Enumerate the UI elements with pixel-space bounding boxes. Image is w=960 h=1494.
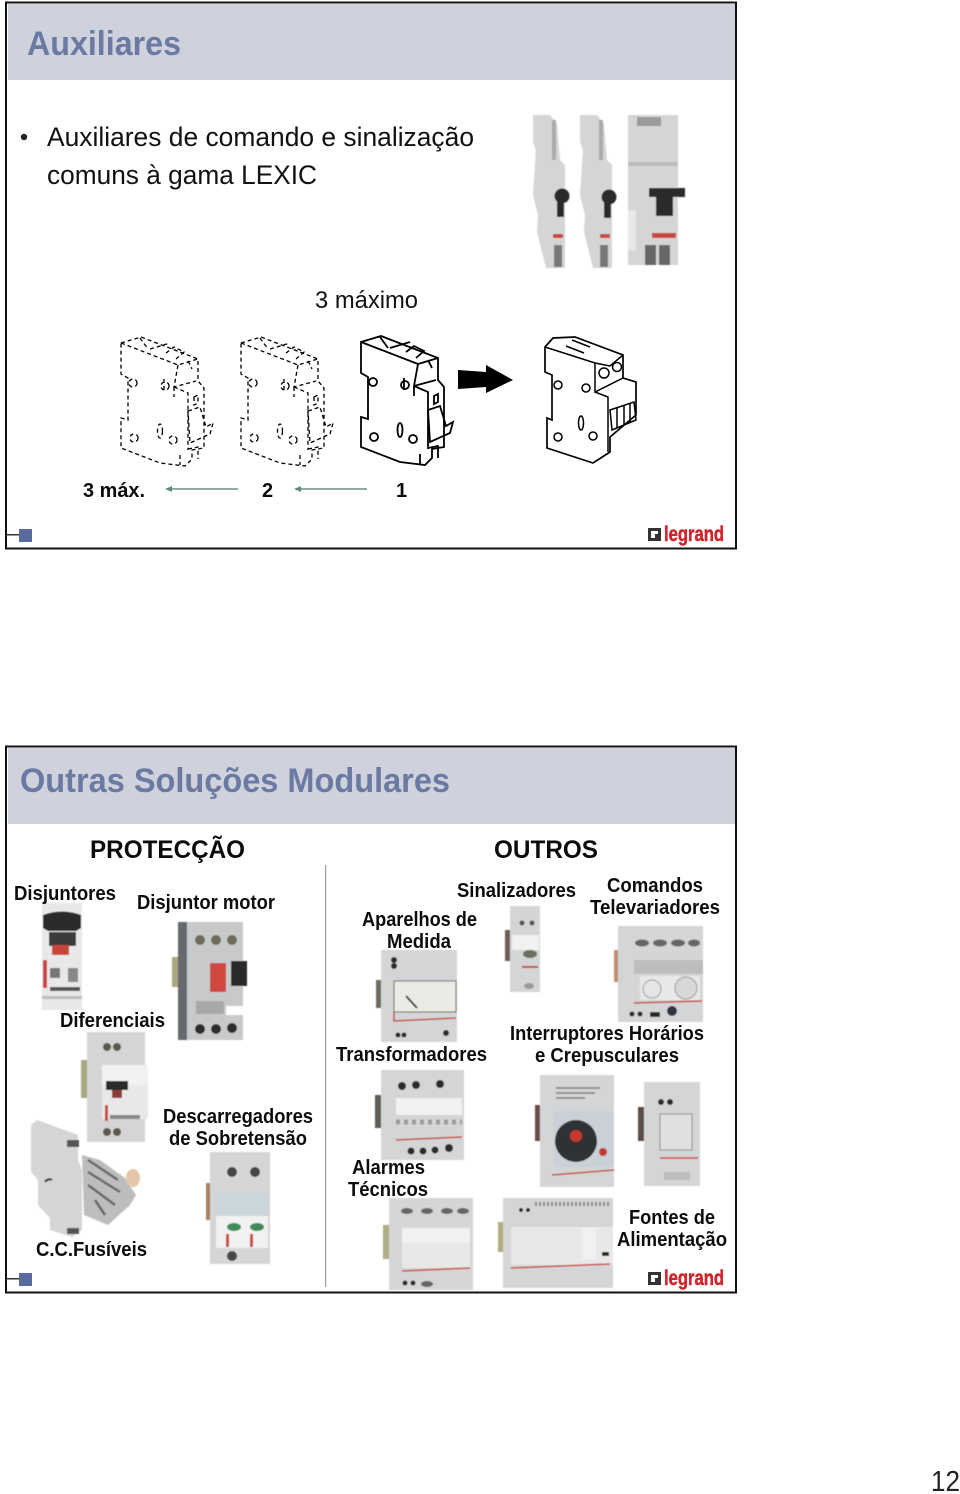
logo: legrand: legrand [664, 1267, 724, 1290]
label: Descarregadores de Sobretensão [163, 1106, 313, 1150]
label: Descarregadores de Sobretensão: de Sobretensão [169, 1128, 307, 1150]
label: Descarregadores de Sobretensão: Descarregadores [163, 1106, 313, 1128]
bullet text: comuns à gama LEXIC [47, 160, 317, 190]
label: Aparelhos de Medida: Medida [387, 931, 452, 953]
corner marker [6, 529, 32, 542]
photo: Fontes de Alimentação [498, 1198, 613, 1288]
title: Auxiliares: Auxiliares [27, 25, 181, 63]
line drawing: solid module 1 [361, 336, 453, 465]
photo: Transformadores [375, 1070, 464, 1160]
label: Sinalizadores: Sinalizadores [457, 880, 576, 902]
label: 3 máximo: 3 máximo [315, 287, 418, 314]
label: C.C.Fusíveis: C.C.Fusíveis [36, 1239, 147, 1261]
photo: Disjuntor motor [172, 922, 247, 1040]
header band: Auxiliares [8, 4, 735, 80]
sequence labels with arrows: 3 máx. [83, 480, 145, 502]
arrow: result [458, 365, 513, 393]
label: Aparelhos de Medida: Aparelhos de [362, 909, 477, 931]
label: Disjuntores: Disjuntores [14, 883, 116, 905]
label: Interruptores Horários e Crepusculares: Interruptores Horários [510, 1023, 704, 1045]
label: Interruptores Horários e Crepusculares: e Crepusculares [535, 1045, 679, 1067]
label: Disjuntor motor: Disjuntor motor [137, 892, 275, 914]
label: Alarmes Técnicos: Técnicos [348, 1179, 428, 1201]
photo: Comandos Televariadores [614, 926, 703, 1022]
label: Comandos Televariadores: Comandos [607, 875, 703, 897]
corner marker [6, 1273, 32, 1286]
photo: Descarregadores de Sobretensão [206, 1152, 270, 1264]
label: Fontes de Alimentação [617, 1207, 727, 1251]
photo: Aparelhos de Medida [376, 950, 457, 1042]
sequence labels with arrows: 2 [262, 480, 273, 502]
label: Diferenciais: Diferenciais [60, 1010, 165, 1032]
label: Comandos Televariadores: Televariadores [590, 897, 720, 919]
photo: Interruptor crepuscular [638, 1082, 700, 1186]
bullet text [21, 122, 474, 190]
photo: Interruptor horário [535, 1075, 614, 1187]
label: Transformadores: Transformadores [336, 1044, 487, 1066]
section heading: PROTECÇÃO: PROTECÇÃO [90, 834, 245, 864]
label: Interruptores Horários e Crepusculares [510, 1023, 704, 1067]
header band: Outras Soluções Modulares [8, 748, 735, 824]
label: Comandos Televariadores [590, 875, 720, 919]
logo: legrand: legrand [664, 523, 724, 546]
photo: Diferenciais [81, 1032, 148, 1142]
title: Outras Soluções Modulares: Outras Soluções Modulares [20, 762, 450, 800]
line drawing: dashed module 3 [121, 337, 213, 466]
logo: legrand [648, 523, 724, 546]
section heading: OUTROS: OUTROS [494, 836, 598, 864]
divider [325, 865, 326, 1287]
line drawing: combined breaker [545, 337, 636, 463]
logo: legrand [648, 1267, 724, 1290]
label: Aparelhos de Medida [362, 909, 477, 953]
photo: three auxiliary modules [533, 115, 685, 268]
bullet text: Auxiliares de comando e sinalização [47, 122, 474, 152]
panel: Outras Soluções Modulares slide [6, 746, 736, 1292]
label: Fontes de Alimentação: Alimentação [617, 1229, 727, 1251]
photo: Sinalizadores [505, 906, 540, 992]
photo: Alarmes Técnicos [383, 1198, 473, 1290]
panel: Auxiliares slide [6, 2, 736, 548]
photo: C.C.Fusíveis [31, 1120, 140, 1237]
sequence labels with arrows [83, 480, 407, 502]
line drawing: dashed module 2 [241, 337, 333, 466]
sequence labels with arrows: 1 [396, 480, 407, 502]
label: Alarmes Técnicos: Alarmes [352, 1157, 425, 1179]
label: Fontes de Alimentação: Fontes de [629, 1207, 715, 1229]
label: Alarmes Técnicos [348, 1157, 428, 1201]
photo: Disjuntores [42, 903, 82, 1010]
